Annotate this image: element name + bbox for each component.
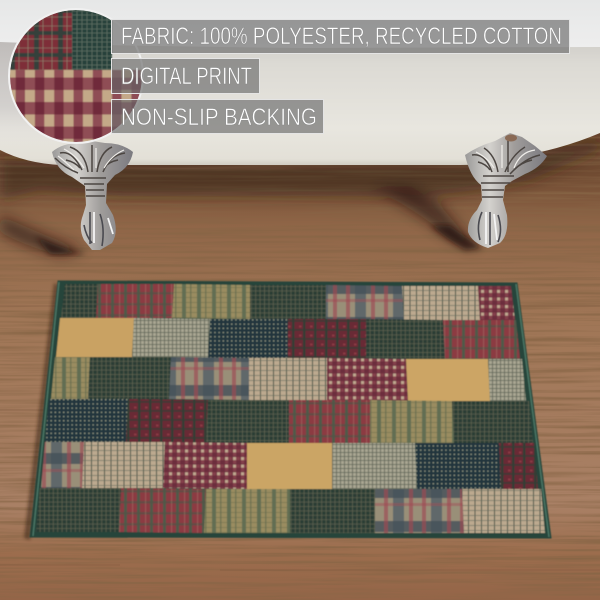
rug row 2 bbox=[56, 318, 520, 359]
swatch: gingham bbox=[9, 70, 143, 144]
rug row 5 bbox=[41, 442, 538, 489]
swatch: green plaid bbox=[72, 9, 112, 70]
patchwork rug bbox=[30, 281, 551, 538]
swatch: red plaid bbox=[9, 9, 72, 70]
label: digital print bbox=[112, 58, 260, 94]
label: non-slip backing: NON-SLIP BACKING bbox=[121, 104, 317, 131]
rug row 4 bbox=[45, 399, 533, 443]
fabric detail circle bbox=[9, 9, 143, 144]
tub shadow on floor bbox=[0, 140, 600, 256]
rug row 6 bbox=[36, 488, 545, 533]
rug border bbox=[30, 281, 551, 538]
rug row 1 bbox=[61, 284, 515, 320]
label: non-slip backing bbox=[112, 100, 324, 134]
icon: right claw foot bbox=[465, 133, 547, 248]
rug row 3 bbox=[51, 357, 526, 401]
icon: left claw foot bbox=[52, 141, 133, 250]
rug shadow bbox=[24, 283, 58, 540]
label: digital print: DIGITAL PRINT bbox=[121, 63, 252, 90]
wood floor background bbox=[0, 130, 600, 600]
bathtub body bbox=[0, 0, 600, 165]
